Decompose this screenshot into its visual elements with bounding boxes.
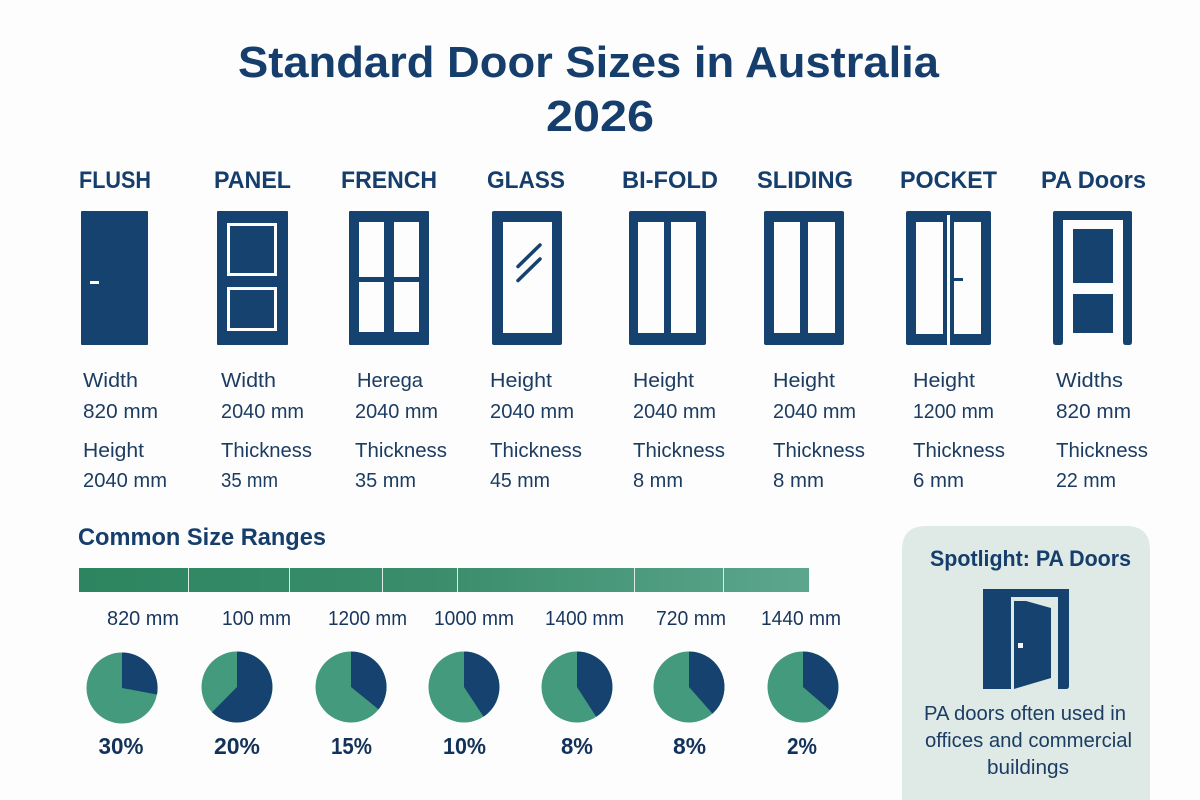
specs: pocket bbox=[913, 370, 1005, 492]
percentage labels: 8% bbox=[561, 733, 593, 759]
specs: french bbox=[355, 370, 447, 492]
specs: flush: 820 mm bbox=[83, 401, 158, 423]
specs: PA doors: Thickness bbox=[1056, 440, 1148, 462]
specs: bi-fold: Thickness bbox=[633, 440, 725, 462]
heading: flush: FLUSH bbox=[79, 167, 151, 194]
specs: panel: Thickness bbox=[221, 440, 312, 462]
heading: pocket: POCKET bbox=[900, 167, 997, 194]
icon: glass door bbox=[492, 211, 562, 345]
title: 2026 bbox=[546, 92, 654, 141]
specs: sliding: Thickness bbox=[773, 440, 865, 462]
panel: glass door bbox=[487, 167, 582, 492]
icon: PA door bbox=[1053, 211, 1132, 345]
pie chart: 10% bbox=[428, 652, 500, 722]
panel: pocket door bbox=[900, 167, 1005, 492]
specs: bi-fold: 2040 mm bbox=[633, 401, 716, 423]
specs: flush: Width bbox=[83, 370, 138, 392]
size range labels: 1000 mm bbox=[434, 608, 514, 630]
title: Standard Door Sizes in Australia bbox=[238, 38, 940, 87]
spotlight description bbox=[924, 703, 1132, 779]
specs: french: 35 mm bbox=[355, 470, 416, 492]
percentage labels: 2% bbox=[787, 733, 817, 759]
specs: pocket: Height bbox=[913, 370, 975, 392]
icon: open door bbox=[983, 589, 1069, 689]
panel: sliding door bbox=[757, 167, 865, 492]
heading: common size ranges: Common Size Ranges bbox=[78, 524, 326, 551]
specs: sliding: 8 mm bbox=[773, 470, 824, 492]
specs: glass: 2040 mm bbox=[490, 401, 574, 423]
specs: panel: 35 mm bbox=[221, 470, 278, 492]
specs: glass bbox=[490, 370, 582, 492]
size range labels: 1400 mm bbox=[545, 608, 624, 630]
size range labels: 100 mm bbox=[222, 608, 291, 630]
specs: glass: Thickness bbox=[490, 440, 582, 462]
specs: pocket: 1200 mm bbox=[913, 401, 994, 423]
panel: french door bbox=[341, 167, 447, 492]
specs: flush bbox=[83, 370, 167, 492]
icon: pocket door bbox=[906, 211, 991, 345]
panel: spotlight PA doors bbox=[902, 526, 1150, 800]
spotlight description: buildings bbox=[987, 757, 1069, 779]
heading: french: FRENCH bbox=[341, 167, 437, 194]
pie chart: 15% bbox=[316, 651, 387, 722]
specs: sliding: Height bbox=[773, 370, 835, 392]
spotlight description: offices and commercial bbox=[925, 730, 1132, 752]
specs: panel: 2040 mm bbox=[221, 401, 304, 423]
size range labels: 1200 mm bbox=[328, 608, 407, 630]
size range labels: 1440 mm bbox=[761, 608, 841, 630]
percentage labels bbox=[98, 733, 817, 759]
percentage labels: 30% bbox=[98, 733, 144, 759]
heading: sliding: SLIDING bbox=[757, 167, 853, 194]
pie chart: 30% bbox=[86, 652, 158, 724]
icon: flush door bbox=[81, 211, 148, 345]
heading: bi-fold: BI-FOLD bbox=[622, 167, 718, 194]
percentage labels: 15% bbox=[331, 733, 372, 759]
heading: glass: GLASS bbox=[487, 167, 565, 194]
specs: panel: Width bbox=[221, 370, 276, 392]
icon: panel door bbox=[217, 211, 288, 345]
pie chart: 2% bbox=[768, 652, 838, 722]
size range labels: 720 mm bbox=[656, 608, 726, 630]
specs: sliding: 2040 mm bbox=[773, 401, 856, 423]
specs: PA doors: 820 mm bbox=[1056, 401, 1131, 423]
title bbox=[238, 38, 940, 141]
spotlight heading: Spotlight: PA Doors bbox=[930, 546, 1131, 571]
specs: french: Herega bbox=[357, 370, 424, 392]
specs: french: 2040 mm bbox=[355, 401, 438, 423]
specs: PA doors: 22 mm bbox=[1056, 470, 1116, 492]
pie chart: 20% bbox=[202, 652, 272, 722]
pie chart: 8% b bbox=[654, 652, 724, 722]
specs: bi-fold bbox=[633, 370, 725, 492]
specs: pocket: Thickness bbox=[913, 440, 1005, 462]
specs: sliding bbox=[773, 370, 865, 492]
spotlight background bbox=[902, 526, 1150, 800]
icon: french door bbox=[349, 211, 429, 345]
specs: PA doors bbox=[1056, 370, 1148, 492]
specs: pocket: 6 mm bbox=[913, 470, 964, 492]
icon: sliding door bbox=[764, 211, 844, 345]
size range labels: 820 mm bbox=[107, 608, 179, 630]
panel: bi-fold door bbox=[622, 167, 725, 492]
specs: PA doors: Widths bbox=[1056, 370, 1123, 392]
bar chart: size range segments bbox=[79, 568, 809, 592]
percentage labels: 8% bbox=[673, 733, 706, 759]
panel: PA doors bbox=[1041, 167, 1148, 492]
panel: panel door bbox=[214, 167, 312, 492]
pie chart row bbox=[86, 651, 838, 724]
specs: french: Thickness bbox=[355, 440, 447, 462]
spotlight description: PA doors often used in bbox=[924, 703, 1126, 725]
specs: glass: Height bbox=[490, 370, 552, 392]
specs: bi-fold: Height bbox=[633, 370, 694, 392]
percentage labels: 10% bbox=[443, 733, 486, 759]
panel: flush door bbox=[79, 167, 167, 492]
specs: bi-fold: 8 mm bbox=[633, 470, 683, 492]
specs: flush: 2040 mm bbox=[83, 470, 167, 492]
heading: PA doors: PA Doors bbox=[1041, 167, 1146, 194]
size range labels bbox=[107, 608, 841, 630]
icon: bi-fold door bbox=[629, 211, 706, 345]
heading: panel: PANEL bbox=[214, 167, 291, 194]
pie chart: 8% a bbox=[542, 652, 612, 722]
specs: glass: 45 mm bbox=[490, 470, 550, 492]
specs: panel bbox=[221, 370, 312, 492]
specs: flush: Height bbox=[83, 440, 144, 462]
percentage labels: 20% bbox=[214, 733, 260, 759]
